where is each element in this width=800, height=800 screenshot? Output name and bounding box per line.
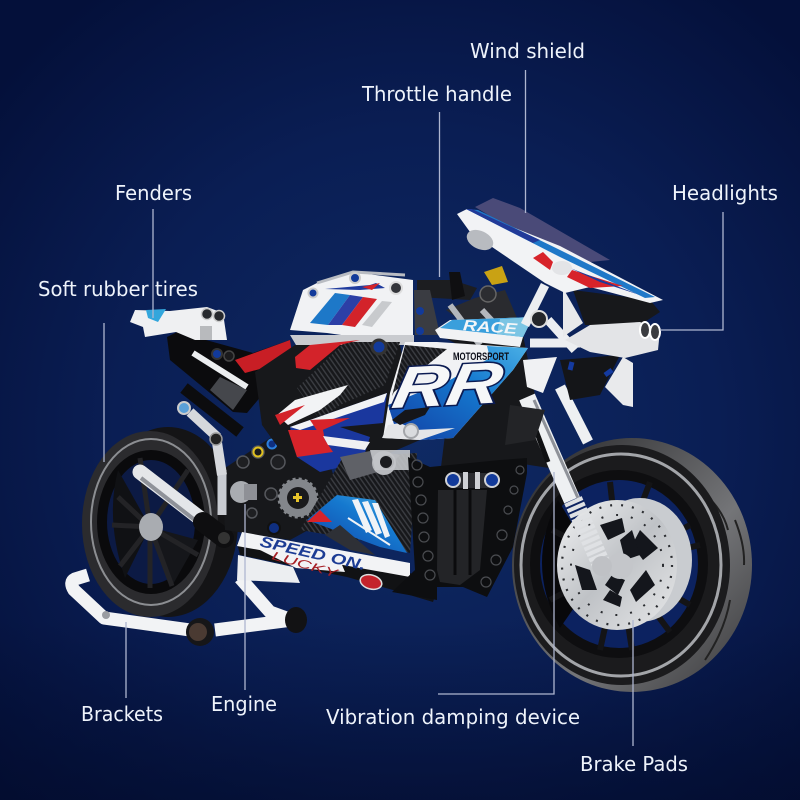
text: speed on: SPEED ON. <box>258 533 367 574</box>
handlebar and throttle <box>417 266 520 345</box>
rear shock <box>178 388 240 475</box>
front forks <box>505 387 612 576</box>
tire tread <box>693 485 744 660</box>
leader: headlights <box>660 212 723 330</box>
text: motorsport: MOTORSPORT <box>453 351 509 363</box>
floor shadow <box>0 620 800 800</box>
headlights <box>563 288 660 407</box>
motorcycle <box>72 198 752 692</box>
under headlight dark assembly <box>560 290 660 400</box>
race panel <box>435 317 533 347</box>
wind shield <box>457 198 663 303</box>
text: RR logo: RR <box>388 351 509 421</box>
leader: engine <box>244 504 246 690</box>
swing arm <box>140 472 230 544</box>
front fairing <box>382 342 528 440</box>
leader: fenders <box>152 209 154 318</box>
dark frame mid <box>255 345 420 470</box>
leader: brake pads <box>632 620 634 746</box>
leader: brackets <box>125 622 127 698</box>
fuel panel bolts <box>372 290 440 354</box>
rear disc <box>588 498 692 622</box>
front disc <box>557 500 677 630</box>
carbon side panel <box>297 342 400 420</box>
label: vibration damping device: Vibration damping device <box>326 705 580 729</box>
icon: front gear <box>279 479 317 517</box>
radiator <box>392 457 527 600</box>
label: fenders: Fenders <box>115 181 192 205</box>
tail subframe <box>167 332 290 413</box>
leader: vibration damping device <box>438 472 554 694</box>
seat unit <box>290 272 414 345</box>
label: brake pads: Brake Pads <box>580 752 688 776</box>
lower carbon fairing <box>300 450 417 555</box>
leader: soft rubber tires <box>103 323 105 462</box>
label: engine: Engine <box>211 692 277 716</box>
tail fender <box>130 307 227 340</box>
label: throttle handle: Throttle handle <box>361 82 512 106</box>
belly pan band <box>237 532 437 602</box>
engine block <box>222 428 345 540</box>
side graphics <box>275 385 387 472</box>
leader: throttle handle <box>438 112 440 277</box>
front wheel <box>512 438 752 692</box>
leader: wind shield <box>524 70 526 213</box>
text: lucky: LUCKY <box>270 548 341 581</box>
red shoulder <box>295 340 360 370</box>
rear wheel <box>82 427 238 617</box>
rear stand <box>72 575 307 646</box>
white steering frame <box>523 285 580 393</box>
mechanical background behind fairing <box>430 320 562 475</box>
visor <box>475 198 610 262</box>
bracket bolts <box>446 472 499 489</box>
race panel: RACE <box>462 317 519 338</box>
label: brackets: Brackets <box>81 702 163 726</box>
fairing nose <box>457 209 663 303</box>
red seat bar <box>235 340 293 373</box>
label: headlights: Headlights <box>672 181 778 205</box>
label: soft rubber tires: Soft rubber tires <box>38 277 198 301</box>
label: wind shield: Wind shield <box>470 39 585 63</box>
icon: rear gear <box>230 481 257 503</box>
